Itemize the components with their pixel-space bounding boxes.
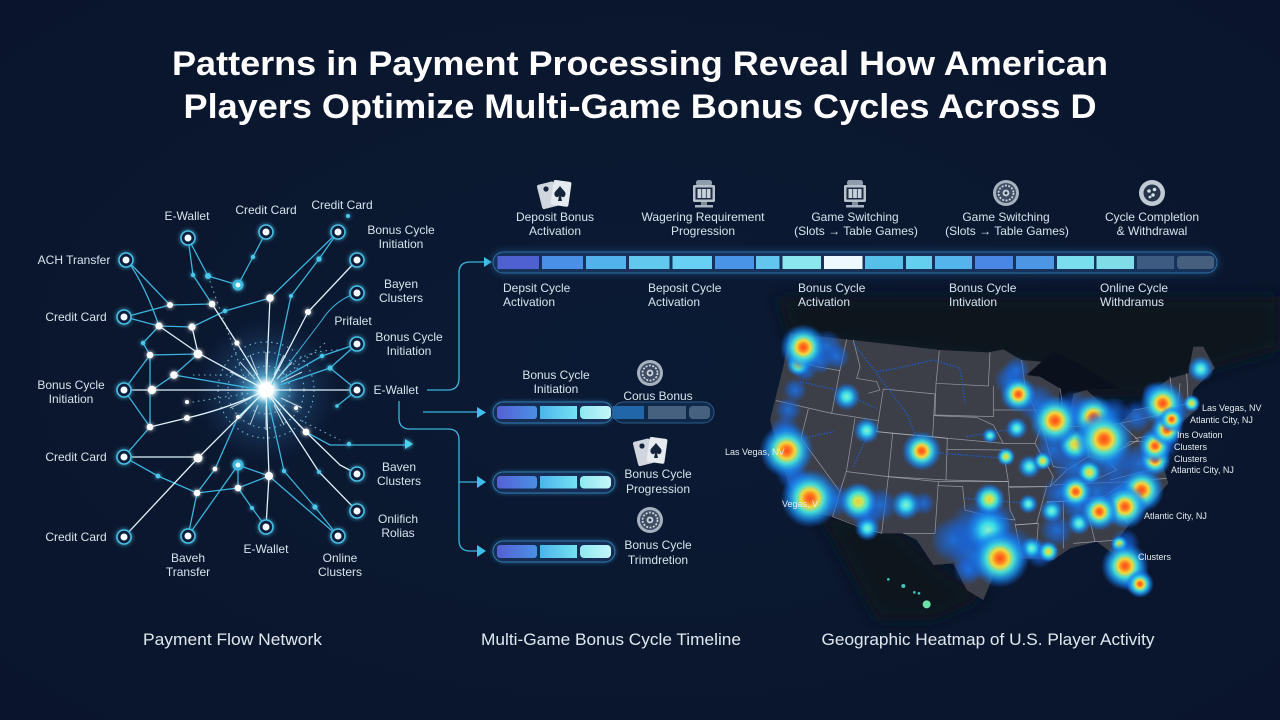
central glow xyxy=(194,318,338,462)
panel: payment flow network xyxy=(37,198,443,579)
heat spots xyxy=(759,324,1214,598)
node labels: Prifalet xyxy=(334,314,372,328)
node labels: E-Wallet xyxy=(165,209,210,223)
sub-cycle labels: Trimdretion xyxy=(628,553,688,567)
rays from hub xyxy=(225,352,308,430)
node labels: Credit Card xyxy=(45,310,107,324)
panel: geographic heatmap of U.S. player activity xyxy=(759,297,1280,620)
sub-cycle labels: Bonus Cycle xyxy=(624,538,692,552)
stage labels below bar: Intivation xyxy=(949,295,997,309)
map city labels: Clusters xyxy=(1174,442,1208,452)
stage labels above bar: (Slots → Table Games) xyxy=(945,224,1069,238)
map city labels: Clusters xyxy=(1174,454,1208,464)
node labels: Baveh xyxy=(171,551,205,565)
Hawaii islands xyxy=(887,578,931,608)
stage labels above bar: & Withdrawal xyxy=(1117,224,1187,238)
stage labels below bar: Bonus Cycle xyxy=(798,281,866,295)
stage labels below bar: Depsit Cycle xyxy=(503,281,571,295)
node labels: Credit Card xyxy=(45,530,107,544)
main timeline bar xyxy=(493,252,1217,273)
section captions: Geographic Heatmap of U.S. Player Activity xyxy=(822,631,1155,649)
stage labels below bar: Withdramus xyxy=(1100,295,1164,309)
stage labels below bar: Activation xyxy=(503,295,555,309)
heat haze xyxy=(770,330,1192,593)
inner white nodes xyxy=(147,294,311,496)
node labels: Bayen xyxy=(384,277,418,291)
node labels xyxy=(37,198,443,579)
node labels: Rolias xyxy=(381,526,415,540)
stage labels below bar: Beposit Cycle xyxy=(648,281,722,295)
title: Players Optimize Multi-Game Bonus Cycles Across D xyxy=(184,88,1096,126)
node labels: Transfer xyxy=(166,565,210,579)
dotted rings xyxy=(187,276,340,440)
map city labels: Atlantic City, NJ xyxy=(1171,465,1234,475)
map city labels: Las Vegas, NV xyxy=(1202,403,1262,413)
section captions: Payment Flow Network xyxy=(143,631,323,649)
map city labels: Atlantic City, NJ xyxy=(1144,511,1207,521)
hub xyxy=(258,382,274,398)
dotted heat trails xyxy=(800,343,1028,503)
sub-cycle labels: Bonus Cycle xyxy=(624,467,692,481)
stage labels above bar: (Slots → Table Games) xyxy=(794,224,918,238)
sub-cycle labels: Corus Bonus xyxy=(623,389,693,403)
endpoint nodes xyxy=(117,225,364,544)
state borders xyxy=(776,339,1197,558)
sub-cycle bar 1 xyxy=(493,402,714,423)
node labels: Baven xyxy=(382,460,416,474)
node labels: Credit Card xyxy=(45,450,107,464)
node labels: Onlifich xyxy=(378,512,418,526)
contiguous U.S. landmass xyxy=(770,333,1215,600)
node labels: Bonus Cycle xyxy=(375,330,443,344)
stage labels above bar: Cycle Completion xyxy=(1105,210,1199,224)
arrow out of network xyxy=(405,439,413,449)
sub-cycle icons xyxy=(633,360,668,533)
node labels: ACH Transfer xyxy=(38,253,110,267)
inner cyan nodes xyxy=(141,214,351,510)
white connections xyxy=(124,260,357,537)
stage labels above bar xyxy=(516,210,1199,238)
stage labels above bar: Progression xyxy=(671,224,735,238)
cyan connections xyxy=(124,232,405,536)
sub-cycle labels: Progression xyxy=(626,482,690,496)
section captions: Multi-Game Bonus Cycle Timeline xyxy=(481,631,741,649)
stage labels above bar: Deposit Bonus xyxy=(516,210,594,224)
node labels: Initiation xyxy=(379,237,423,251)
map city labels: Atlantic City, NJ xyxy=(1190,415,1253,425)
node labels: E-Wallet xyxy=(244,542,289,556)
map city labels: Ins Ovation xyxy=(1177,430,1223,440)
title xyxy=(172,45,1108,126)
stage labels below bar: Activation xyxy=(798,295,850,309)
node labels: Clusters xyxy=(377,474,421,488)
node labels: Initiation xyxy=(49,392,93,406)
section captions xyxy=(143,631,1155,649)
node labels: E-Wallet xyxy=(374,383,419,397)
stage labels below bar: Online Cycle xyxy=(1100,281,1168,295)
arrowheads xyxy=(477,257,492,557)
map city labels xyxy=(725,403,1262,562)
node labels: Online xyxy=(323,551,358,565)
stage labels below bar: Bonus Cycle xyxy=(949,281,1017,295)
node labels: Clusters xyxy=(318,565,362,579)
node labels: Clusters xyxy=(379,291,423,305)
sub-cycle bar 3 xyxy=(493,541,615,562)
stage icons xyxy=(537,180,1165,209)
node labels: Bonus Cycle xyxy=(37,378,105,392)
sub-cycle labels: Initiation xyxy=(534,382,578,396)
map city labels: Las Vegas, NV xyxy=(725,447,785,457)
Canada and Mexico landmass xyxy=(777,297,1280,620)
node labels: Credit Card xyxy=(311,198,373,212)
flow arrows xyxy=(399,262,484,551)
stage labels below bar: Activation xyxy=(648,295,700,309)
sub-cycle labels xyxy=(522,368,693,567)
stage labels above bar: Game Switching xyxy=(811,210,899,224)
title: Patterns in Payment Processing Reveal How American xyxy=(172,45,1108,83)
node labels: Bonus Cycle xyxy=(367,223,435,237)
teal junction nodes xyxy=(232,280,244,470)
panel: multi-game bonus cycle timeline xyxy=(399,180,1217,567)
stage labels above bar: Game Switching xyxy=(962,210,1050,224)
sub-cycle labels: Bonus Cycle xyxy=(522,368,590,382)
stage labels above bar: Activation xyxy=(529,224,581,238)
map city labels: Vegas, V xyxy=(782,499,818,509)
node labels: Credit Card xyxy=(235,203,297,217)
node labels: Initiation xyxy=(387,344,431,358)
stage labels above bar: Wagering Requirement xyxy=(642,210,765,224)
Great Lakes xyxy=(1027,352,1130,427)
sub-cycle bar 2 xyxy=(493,472,615,493)
map city labels: Clusters xyxy=(1138,552,1172,562)
stage labels below bar xyxy=(503,281,1168,309)
